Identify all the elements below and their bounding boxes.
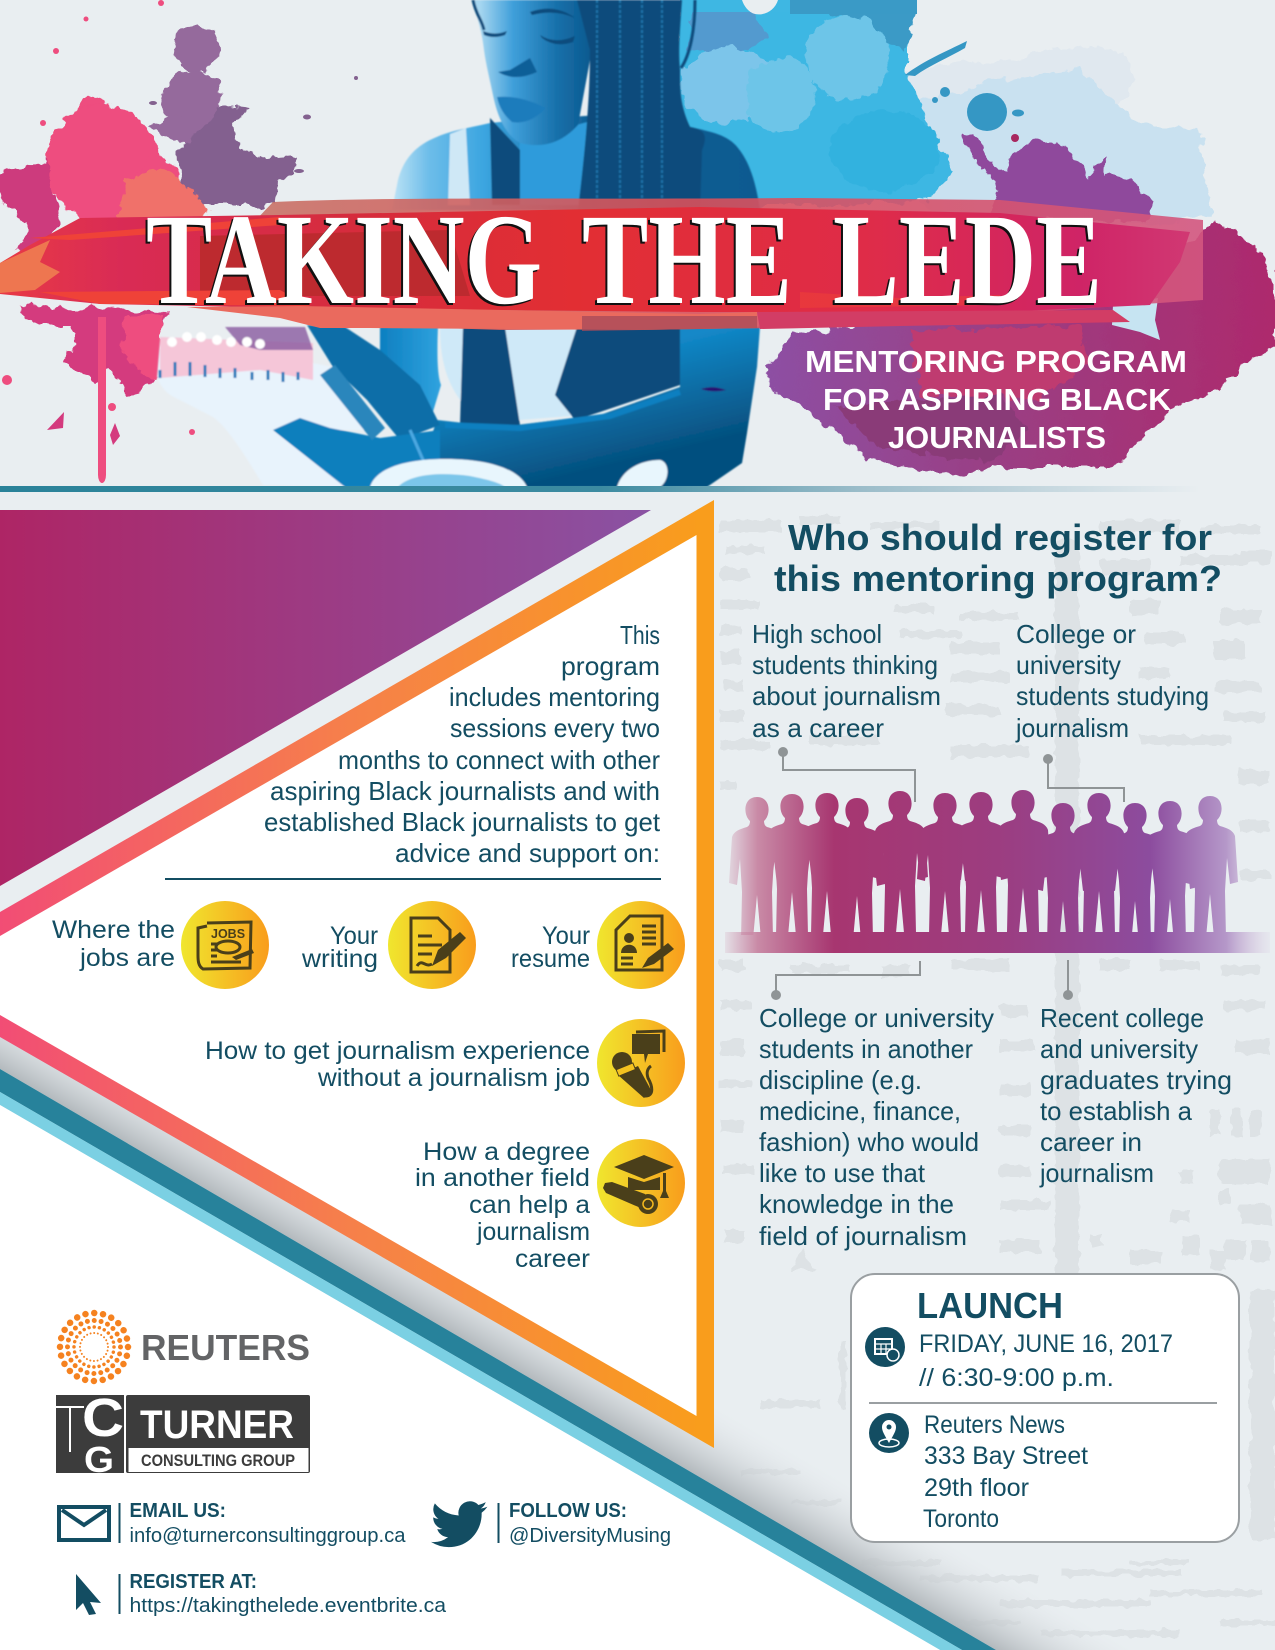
light blue diagonal stripe: [0, 1092, 962, 1650]
white program panel: [0, 535, 696, 1416]
audience: recent graduates: journalism: [1039, 1158, 1154, 1188]
item: your writing: writing: [301, 945, 378, 973]
contact: email: info@turnerconsultinggroup.ca: [130, 1525, 406, 1547]
paint drip and droplets: [2, 0, 195, 483]
logo: reuters: REUTERS: [141, 1327, 310, 1368]
audience: high school: students thinking: [752, 650, 938, 680]
subtitle: MENTORING PROGRAM: [805, 344, 1187, 379]
program description: months to connect with other: [338, 745, 660, 775]
item: your resume: resume: [511, 945, 590, 973]
teal diagonal stripe: [0, 1069, 996, 1650]
item: journalism experience: How to get journalism experience: [205, 1037, 590, 1065]
audience: other discipline: fashion) who would: [759, 1127, 979, 1157]
connector: college: [1043, 754, 1124, 802]
hands: [307, 325, 440, 440]
coffee cup: [370, 459, 668, 487]
icon: cursor arrow: [76, 1574, 101, 1615]
audience: high school: High school: [752, 619, 882, 649]
heading: who should register: Who should register for: [788, 517, 1212, 558]
audience: recent graduates: and university: [1040, 1034, 1198, 1064]
connector: other discipline: [771, 961, 920, 1000]
lower body: [440, 327, 583, 420]
paint banner: [0, 198, 1203, 331]
contact: email: EMAIL US:: [130, 1500, 226, 1522]
subtitle: [805, 344, 1187, 455]
launch heading: LAUNCH: [917, 1285, 1063, 1326]
crowd silhouette: [725, 785, 1270, 953]
audience: recent graduates: graduates trying: [1040, 1065, 1232, 1095]
contact: register: [130, 1571, 447, 1617]
title: THE: [582, 188, 792, 332]
program description: [264, 620, 661, 868]
item: degree in another field: How a degree: [423, 1138, 590, 1166]
item: where the jobs are: jobs are: [79, 944, 175, 972]
pink splash: [0, 95, 212, 262]
contact: register: REGISTER AT:: [130, 1571, 257, 1593]
logo: turner consulting group: G: [84, 1439, 114, 1480]
program description: aspiring Black journalists and with: [270, 776, 660, 806]
icon: microphone and speech bubble: [612, 1031, 664, 1098]
launch address: [923, 1411, 1088, 1533]
logo: turner consulting group: TURNER: [140, 1403, 294, 1447]
icon: envelope: [59, 1507, 109, 1540]
icon: newspaper: [198, 922, 254, 969]
audience: college journalism students: university: [1016, 650, 1121, 680]
connector: graduates: [1063, 960, 1073, 1000]
icon: document and pen: [411, 918, 466, 972]
audience: other discipline: [759, 1003, 994, 1251]
audience: recent graduates: career in: [1040, 1127, 1142, 1157]
audience: high school: as a career: [752, 713, 884, 743]
audience: other discipline: knowledge in the: [759, 1189, 954, 1219]
program description: advice and support on:: [395, 838, 660, 868]
contact: email: [130, 1500, 406, 1547]
launch address: 333 Bay Street: [924, 1442, 1088, 1470]
item: degree in another field: can help a: [469, 1191, 590, 1219]
item: your writing: [301, 901, 476, 989]
launch date: [919, 1330, 1173, 1392]
right arm: [430, 327, 760, 487]
orange triangle frame: [0, 500, 714, 1448]
connector: high school: [778, 747, 915, 802]
program description: includes mentoring: [449, 682, 660, 712]
contact: twitter: [509, 1500, 671, 1547]
subtitle: JOURNALISTS: [888, 420, 1106, 455]
audience: college journalism students: students studying: [1016, 681, 1209, 711]
audience: recent graduates: Recent college: [1040, 1003, 1204, 1033]
audience: other discipline: College or university: [759, 1003, 994, 1033]
launch date: FRIDAY, JUNE 16, 2017: [919, 1330, 1173, 1358]
woman: [157, 0, 760, 487]
magenta blob: [768, 220, 1275, 477]
lower pink splash: [20, 305, 170, 395]
heading: who should register: this mentoring program?: [774, 558, 1222, 599]
audience: other discipline: field of journalism: [759, 1221, 967, 1251]
item: your resume: Your: [542, 922, 590, 950]
teal header rule: [0, 486, 1200, 492]
item: degree in another field: career: [515, 1245, 590, 1273]
shoulders: [392, 110, 760, 210]
icon: twitter bird: [431, 1501, 487, 1547]
audience: high school: [752, 619, 941, 743]
audience: recent graduates: to establish a: [1040, 1096, 1193, 1126]
contact: twitter: FOLLOW US:: [509, 1500, 627, 1522]
white contact panel: [0, 1105, 940, 1650]
pale blue splash: [905, 48, 1213, 225]
teal streak and drops: [905, 41, 1024, 131]
notebook: [157, 340, 380, 487]
heading: who should register: [774, 517, 1222, 599]
item: where the jobs are: Where the: [52, 916, 175, 944]
audience: high school: about journalism: [752, 681, 941, 711]
logo: reuters: [60, 1313, 310, 1381]
purple splash right: [963, 130, 1152, 222]
audience: college journalism students: journalism: [1015, 713, 1129, 743]
item: journalism experience: without a journalism job: [317, 1064, 590, 1092]
icon: location pin: [869, 1413, 909, 1453]
launch date: // 6:30-9:00 p.m.: [919, 1364, 1114, 1392]
panel: launch details: [851, 1274, 1239, 1542]
icon: calendar: [865, 1327, 905, 1367]
icon: graduation cap and diploma: [603, 1155, 674, 1214]
subtitle: FOR ASPIRING BLACK: [823, 382, 1172, 417]
audience: other discipline: students in another: [759, 1034, 973, 1064]
program description: established Black journalists to get: [264, 807, 661, 837]
audience: recent graduates: [1039, 1003, 1232, 1188]
program description: program: [561, 651, 660, 681]
item: your writing: Your: [330, 922, 378, 950]
audience: other discipline: medicine, finance,: [759, 1096, 961, 1126]
title: [146, 188, 1102, 332]
launch address: Reuters News: [924, 1411, 1065, 1439]
head: [473, 0, 590, 145]
contact: register: https://takingthelede.eventbrite.ca: [130, 1595, 447, 1617]
blue splash: [672, 6, 953, 205]
item: where the jobs are: [52, 901, 269, 989]
item: degree in another field: journalism: [476, 1218, 590, 1246]
audience: other discipline: discipline (e.g.: [759, 1065, 922, 1095]
audience: college journalism students: [1015, 619, 1209, 743]
item: your resume: [511, 901, 685, 989]
title: TAKING: [146, 188, 542, 332]
audience: other discipline: like to use that: [759, 1158, 926, 1188]
logo: turner consulting group: C: [82, 1388, 124, 1448]
launch address: 29th floor: [924, 1474, 1029, 1502]
section background: diagonal shadow band: [0, 990, 1136, 1650]
title: LEDE: [833, 188, 1102, 332]
hero illustration: [0, 0, 1275, 487]
program description: This: [620, 620, 660, 650]
icon: newspaper: JOBS: [211, 927, 245, 941]
item: degree in another field: [415, 1138, 685, 1273]
launch address: Toronto: [923, 1505, 999, 1533]
purple gray splash: [150, 24, 296, 205]
contact: twitter: @DiversityMusing: [509, 1525, 671, 1547]
hair: [577, 0, 705, 210]
audience: college journalism students: College or: [1016, 619, 1136, 649]
item: journalism experience: [205, 1019, 685, 1107]
item: degree in another field: in another field: [415, 1164, 590, 1192]
logo: turner consulting group: CONSULTING GROUP: [141, 1451, 295, 1470]
icon: resume: [616, 916, 674, 970]
program description: sessions every two: [450, 713, 660, 743]
purple triangle: [0, 510, 651, 886]
logo: turner consulting group: [56, 1388, 310, 1480]
